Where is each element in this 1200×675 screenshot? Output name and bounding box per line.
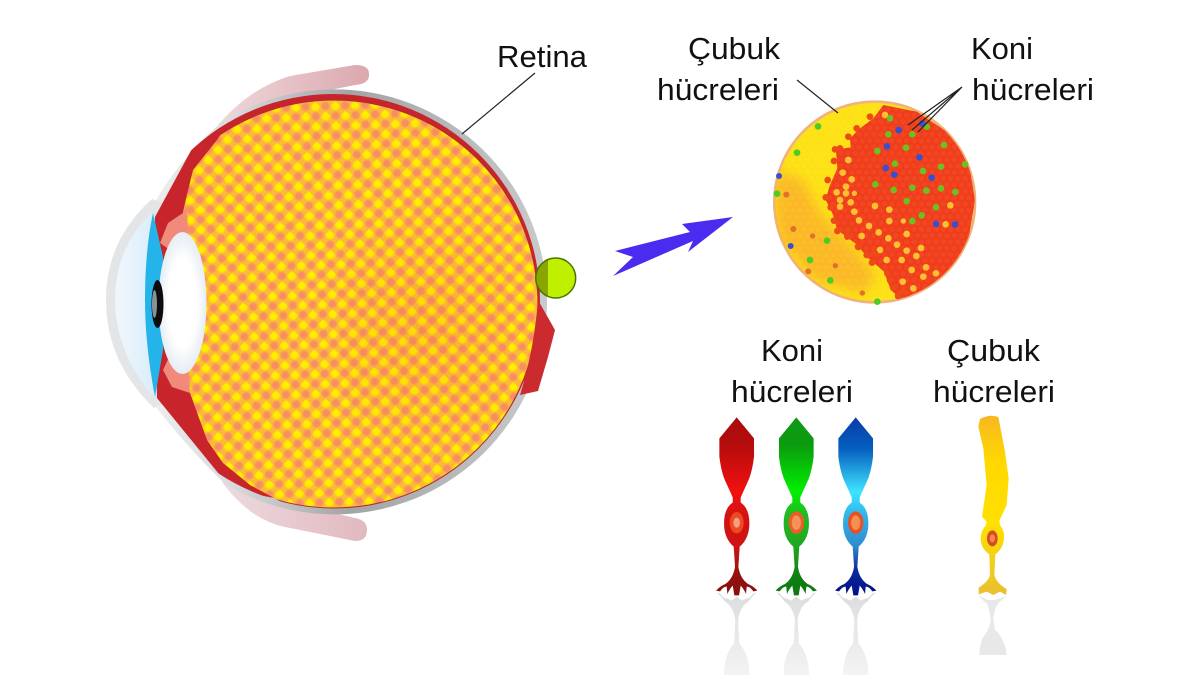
- lower eye muscle: [222, 480, 367, 541]
- label: cone cells bottom: hücreleri: [731, 374, 853, 409]
- label: cone cells top: Koni: [971, 31, 1033, 66]
- lower ciliary body: [163, 355, 190, 393]
- eye cross-section: [106, 65, 576, 541]
- blue cone dots: [776, 120, 958, 249]
- label: rod cells bottom: [933, 333, 1055, 409]
- label: cone cells bottom: [731, 333, 853, 409]
- sample marker circle: [534, 257, 576, 299]
- label: cone cells bottom: Koni: [761, 333, 823, 368]
- choroid: [126, 94, 540, 508]
- label: rod cells top: Çubuk: [688, 31, 781, 66]
- retina: [182, 100, 538, 508]
- yellow dots on red: [833, 112, 954, 292]
- sclera: [152, 89, 547, 514]
- red dots at boundary: [822, 113, 907, 299]
- aqueous humour: [145, 213, 163, 397]
- upper ciliary body: [160, 205, 190, 250]
- red cone cell: [716, 417, 757, 675]
- label: rod cells top: hücreleri: [657, 72, 779, 107]
- blue cone cell: [835, 417, 876, 675]
- green dots on yellow: [774, 123, 881, 305]
- label: cone cells top: [908, 31, 1094, 132]
- red cone area: [826, 105, 975, 299]
- cornea: [106, 199, 170, 408]
- label: Retina: [462, 39, 588, 134]
- cornea inner: [115, 212, 160, 398]
- label: rod cells bottom: Çubuk: [947, 333, 1041, 368]
- upper eye muscle: [218, 65, 369, 125]
- pupil: [152, 280, 164, 328]
- arrow: [613, 217, 733, 276]
- yellow rod cell: [978, 416, 1009, 655]
- green cone cell: [776, 417, 817, 675]
- lens: [158, 232, 206, 374]
- label: rod cells bottom: hücreleri: [933, 374, 1055, 409]
- label: cone cells top: hücreleri: [972, 72, 1094, 107]
- retina mosaic circle: [773, 100, 976, 305]
- orange rod area: [773, 170, 877, 293]
- green cone dots: [872, 115, 968, 224]
- hexagonal texture: [775, 102, 975, 302]
- red-orange dots on yellow: [783, 192, 865, 296]
- label: Retina: Retina: [497, 39, 588, 74]
- label: rod cells top: [657, 31, 838, 113]
- optic nerve: [520, 300, 555, 395]
